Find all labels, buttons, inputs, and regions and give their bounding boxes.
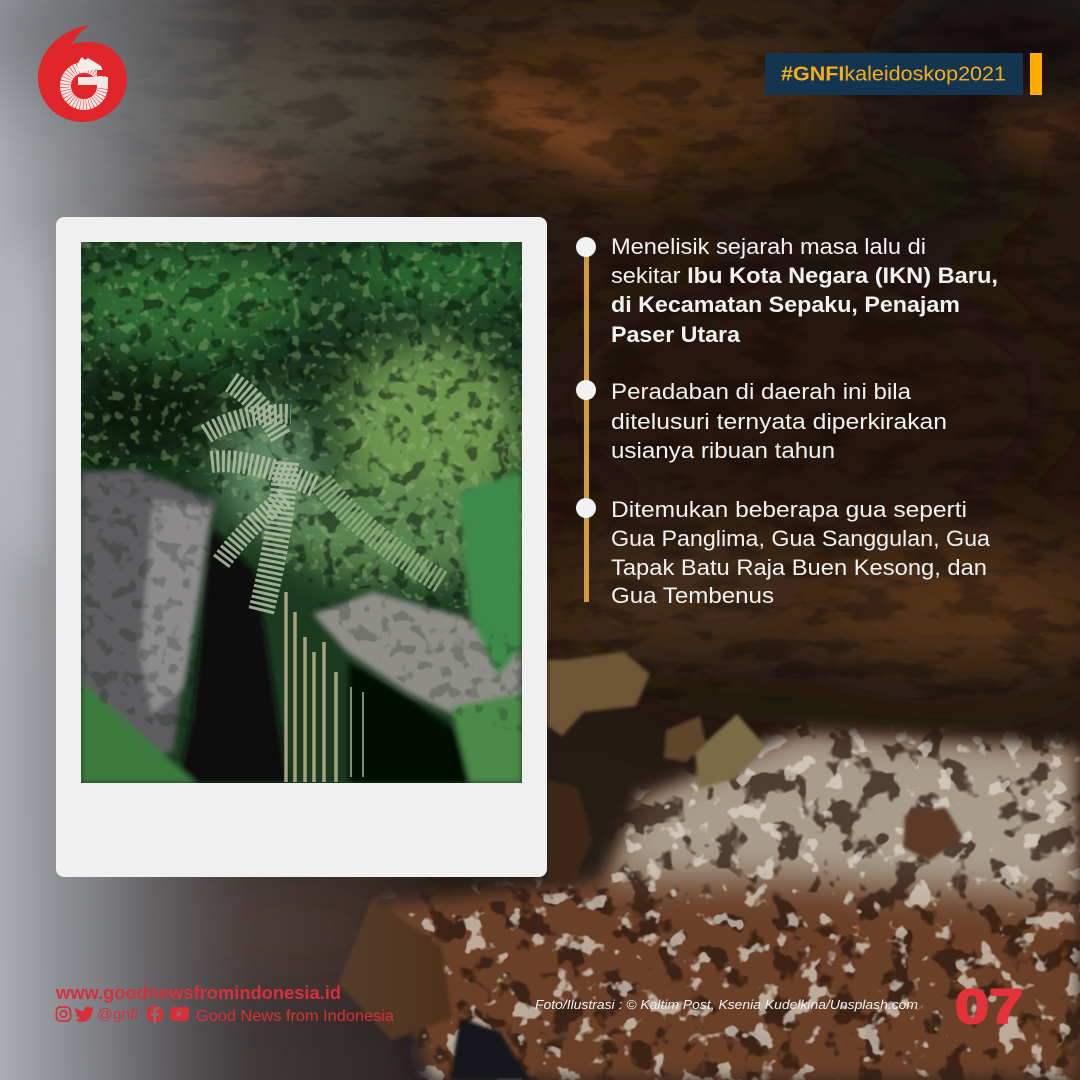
footer: website and social handles: www.goodnewsfromindonesia.id bbox=[55, 983, 341, 1003]
icon: youtube bbox=[170, 1007, 189, 1021]
hashtag badge: #GNFIkaleidoskop2021 bbox=[781, 62, 1006, 86]
point 1: Menelisik sejarah masa lalu di bbox=[611, 234, 926, 259]
point 2 bbox=[611, 379, 947, 463]
footer: website and social handles: Good News from Indonesia bbox=[196, 1008, 394, 1025]
point 3: Ditemukan beberapa gua seperti bbox=[611, 497, 967, 522]
point 1: sekitar Ibu Kota Negara (IKN) Baru, bbox=[611, 263, 998, 288]
point 1 bbox=[611, 234, 998, 347]
point 2: ditelusuri ternyata diperkirakan bbox=[611, 409, 947, 434]
point 3 bbox=[611, 497, 990, 608]
icon: facebook bbox=[146, 1006, 164, 1023]
icon: twitter bbox=[75, 1007, 94, 1022]
left grey fade bbox=[0, 0, 560, 1080]
point 3: Tapak Batu Raja Buen Kesong, dan bbox=[611, 555, 987, 580]
cave entrance photo bbox=[81, 242, 522, 783]
point 3: Gua Tembenus bbox=[611, 583, 774, 608]
rocky cave floor bbox=[350, 700, 1080, 1080]
point 1: Paser Utara bbox=[611, 322, 740, 347]
footer: website and social handles: @gnfi bbox=[97, 1006, 138, 1023]
icon: instagram bbox=[56, 1007, 70, 1021]
polaroid photo card bbox=[56, 217, 547, 877]
boulders bbox=[338, 652, 963, 1080]
point 2: Peradaban di daerah ini bila bbox=[611, 379, 912, 404]
point 3: Gua Panglima, Gua Sanggulan, Gua bbox=[611, 526, 990, 551]
hanging roots bbox=[286, 592, 336, 782]
point 2: usianya ribuan tahun bbox=[611, 438, 835, 463]
photo credit: Foto/Ilustrasi : © Kaltim Post, Ksenia Kudelkina/Unsplash.com bbox=[535, 998, 918, 1012]
page number: 07 bbox=[955, 981, 1023, 1034]
fern fronds bbox=[206, 382, 441, 612]
point 1: di Kecamatan Sepaku, Penajam bbox=[611, 292, 960, 317]
